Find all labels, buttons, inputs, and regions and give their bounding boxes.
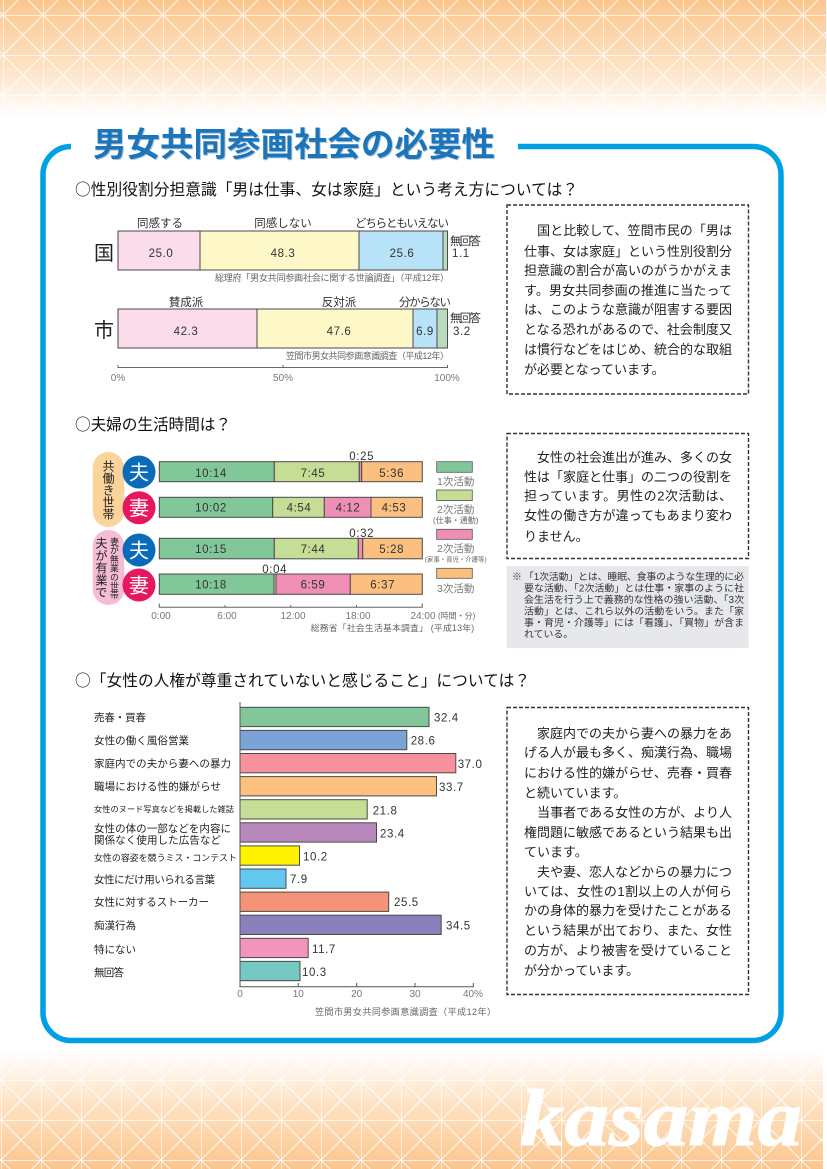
category labels: 痴漢行為 xyxy=(94,919,136,932)
icon: wife xyxy=(122,491,156,524)
value axis xyxy=(237,702,483,1000)
bar: dual-income husband: 0:25 xyxy=(349,451,374,463)
note box: れている。 xyxy=(524,628,573,640)
bar: dual-income wife: 10:02 xyxy=(195,502,227,514)
time axis: 総務省「社会生活基本調査」 (平成13年) xyxy=(311,622,474,633)
percent axis: 50% xyxy=(273,373,293,384)
heading: section 1: ○性別役割分担意識「男は仕事、女は家庭」という考え方については？ xyxy=(75,177,578,200)
legend: (家事・育児・介護等) xyxy=(425,554,487,564)
text box 3: 当事者である女性の方が、より人 xyxy=(524,805,732,820)
chart: gender role stacked bars xyxy=(94,216,482,384)
bar: single-income wife: 6:59 xyxy=(301,580,325,592)
value labels: 33.7 xyxy=(439,782,464,794)
value labels: 7.9 xyxy=(290,874,308,886)
category labels: 家庭内での夫から妻への暴力 xyxy=(94,757,231,770)
heading: section 3: ○「女性の人権が尊重されていないと感じること」については？ xyxy=(75,668,530,691)
bar: single-income husband: 5:28 xyxy=(379,544,404,556)
legend: 2次活動 xyxy=(437,503,474,516)
text box 3: という結果が出ており、また、女性 xyxy=(524,923,732,938)
value axis: 20 xyxy=(351,989,363,1000)
note box: 活動」とは、これら以外の活動をいう。また「家 xyxy=(524,604,744,618)
icon: wife xyxy=(122,568,156,602)
icon: wife: 妻 xyxy=(129,574,149,598)
category labels: 職場における性的嫌がらせ xyxy=(94,780,221,793)
bar row: national: 1.1 xyxy=(452,248,470,260)
bar: dual-income husband: 5:36 xyxy=(379,468,404,480)
note box xyxy=(507,566,749,648)
text box 2: 性は「家庭と仕事」の二つの役割を xyxy=(524,470,732,484)
bar row: national xyxy=(94,216,482,283)
category labels: 女性にだけ用いられる言葉 xyxy=(94,873,216,886)
icon: husband xyxy=(122,456,156,488)
text box 2 xyxy=(507,434,748,558)
category labels: 女性の体の一部などを内容に xyxy=(94,822,231,835)
category labels xyxy=(94,711,237,979)
text box 1: は慣行などをはじめ、統合的な取組 xyxy=(524,342,732,357)
percent axis: 100% xyxy=(434,373,460,384)
pill: husband employed, wife not employed: 妻が無業の世帯 xyxy=(109,536,119,600)
pill: husband employed, wife not employed xyxy=(93,530,124,605)
bar row: city: 無回答 xyxy=(450,311,482,325)
bar: dual-income wife: 4:53 xyxy=(382,502,406,514)
bar row: national: どちらともいえない xyxy=(355,217,449,230)
bar row: city: 分からない xyxy=(399,296,451,309)
bar: dual-income wife: 4:12 xyxy=(336,502,360,514)
category labels: 女性の容姿を競うミス・コンテスト xyxy=(94,852,237,863)
bar: dual-income wife: 4:54 xyxy=(287,502,311,514)
text box 1: 仕事、女は家庭」という性別役割分 xyxy=(524,244,732,259)
text box 3: 権問題に敏感であるという結果も出 xyxy=(524,825,732,840)
bar row: national: 同感しない xyxy=(254,216,312,230)
text box 3: げる人が最も多く、痴漢行為、職場 xyxy=(524,745,732,760)
note box: 「1次活動」とは、睡眠、食事のような生理的に必 xyxy=(524,570,744,583)
bar: single-income wife: 0:04 xyxy=(262,564,287,576)
text box 3: いては、女性の1割以上の人が何ら xyxy=(524,884,732,899)
icon: husband xyxy=(122,534,156,566)
bar: dual-income wife xyxy=(159,497,422,517)
value labels: 10.3 xyxy=(302,967,327,979)
text box 2: りません。 xyxy=(524,529,589,544)
bar row: national: 無回答 xyxy=(450,234,482,248)
value labels xyxy=(290,712,482,979)
time axis: 0:00 xyxy=(151,611,171,622)
time axis xyxy=(151,604,476,633)
bar row: city: 笠間市男女共同参画意識調査（平成12年） xyxy=(286,350,449,361)
text box 3 xyxy=(507,708,748,994)
percent axis xyxy=(111,365,460,384)
legend: 3次活動 xyxy=(437,582,474,595)
text box 2: 女性の社会進出が進み、多くの女 xyxy=(524,450,732,465)
time axis: (時間・分) xyxy=(438,612,476,620)
chart: couples daily time xyxy=(93,451,487,633)
bar row: city: 反対派 xyxy=(322,296,357,309)
bar row: national: 総理府「男女共同参画社会に関する世論調査」（平成12年） xyxy=(215,272,449,283)
value labels: 37.0 xyxy=(458,759,482,771)
icon: wife: 妻 xyxy=(129,497,149,520)
time axis: 24:00 xyxy=(410,611,436,622)
value labels: 21.8 xyxy=(373,805,397,817)
text box 1: す。男女共同参画の推進に当たって xyxy=(524,283,732,298)
text box 1: が必要となっています。 xyxy=(524,362,665,377)
value labels: 34.5 xyxy=(446,920,471,932)
note box: 事・育児・介護等」には「看護」、「買物」が含ま xyxy=(524,616,744,629)
text box 3: の方が、より被害を受けていること xyxy=(524,943,732,958)
bar row: city: 42.3 xyxy=(174,326,198,338)
logo: kasama: kasama xyxy=(520,1075,802,1163)
value axis: 10 xyxy=(293,989,304,1000)
text box 1 xyxy=(507,205,748,394)
bar row: city: 6.9 xyxy=(416,326,434,338)
bar: single-income husband: 10:15 xyxy=(195,544,227,556)
bar: single-income wife xyxy=(159,564,422,594)
value labels: 10.2 xyxy=(303,852,328,864)
value labels: 11.7 xyxy=(312,944,336,956)
legend: 1次活動 xyxy=(437,475,474,488)
text box 3: ています。 xyxy=(524,844,588,860)
time axis: 18:00 xyxy=(345,611,371,622)
bar row: city: 3.2 xyxy=(453,326,471,338)
bar row: national: 25.0 xyxy=(149,248,173,260)
bar row: city: 賛成派 xyxy=(169,295,204,309)
value labels: 25.5 xyxy=(394,897,419,909)
text box 3: が分かっています。 xyxy=(524,963,639,978)
text box 1: 担意識の割合が高いのがうかがえま xyxy=(524,263,732,278)
bar: single-income wife: 10:18 xyxy=(195,580,227,592)
category labels: 関係なく使用した広告など xyxy=(94,834,222,846)
source: 笠間市男女共同参画意識調査（平成12年） xyxy=(315,1006,496,1017)
note box: 会生活を行う上で義務的な性格の強い活動、「3次 xyxy=(524,593,744,606)
bar: dual-income husband: 7:45 xyxy=(301,468,325,480)
bar: dual-income husband: 10:14 xyxy=(195,468,227,480)
bar: single-income husband: 0:32 xyxy=(349,528,374,540)
panel frame xyxy=(43,146,781,1040)
bar row: national: 同感する xyxy=(137,216,183,230)
text box 3: における性的嫌がらせ、売春・買春 xyxy=(524,766,732,780)
category labels: 女性に対するストーカー xyxy=(94,896,209,908)
title: 男女共同参画社会の必要性 xyxy=(93,127,495,164)
pill: dual-income households xyxy=(93,452,124,527)
bars xyxy=(240,707,456,981)
bar: single-income husband xyxy=(159,528,422,559)
note box: ※ xyxy=(512,572,522,583)
pill: dual-income households: 共働き世帯 xyxy=(101,460,115,520)
bar: single-income husband: 7:44 xyxy=(301,544,325,556)
value labels: 28.6 xyxy=(411,736,435,748)
value axis: 40% xyxy=(463,989,483,1000)
text box 1: となる恐れがあるので、社会制度又 xyxy=(524,322,732,337)
percent axis: 0% xyxy=(111,373,125,384)
bar row: city xyxy=(94,295,482,361)
heading: section 2: ○夫婦の生活時間は？ xyxy=(75,412,231,435)
bar row: national: 48.3 xyxy=(271,248,295,260)
icon: husband: 夫 xyxy=(129,462,149,484)
text box 2: 女性の働き方が違ってもあまり変わ xyxy=(524,508,732,523)
chart: horizontal bar chart xyxy=(94,702,496,1017)
category labels: 特にない xyxy=(94,944,136,956)
bottom band with logo xyxy=(0,1050,823,1169)
legend xyxy=(425,462,487,595)
bar row: national: 25.6 xyxy=(390,248,414,260)
value axis: 0 xyxy=(237,989,243,1000)
bar: single-income wife: 6:37 xyxy=(370,580,395,592)
value labels: 23.4 xyxy=(380,828,405,840)
bar row: city: 47.6 xyxy=(327,326,351,338)
text box 1: 国と比較して、笠間市民の「男は xyxy=(524,223,732,238)
value labels: 32.4 xyxy=(434,712,459,724)
category labels: 売春・買春 xyxy=(94,711,146,724)
category labels: 無回答 xyxy=(94,966,124,979)
text box 3: 家庭内での夫から妻への暴力をあ xyxy=(524,726,732,741)
category labels: 女性の働く風俗営業 xyxy=(94,734,190,747)
value axis: 30 xyxy=(409,989,421,1000)
text box 2: 担っています。男性の2次活動は、 xyxy=(524,488,732,504)
note box: 要な活動、「2次活動」とは仕事・家事のように社 xyxy=(524,582,744,594)
bar row: city: 市 xyxy=(94,319,114,342)
bar: dual-income husband xyxy=(159,451,422,482)
legend: 2次活動 xyxy=(437,542,474,555)
top decorative band xyxy=(0,0,826,118)
text box 3: 夫や妻、恋人などからの暴力につ xyxy=(524,864,732,880)
category labels: 女性のヌード写真などを掲載した雑誌 xyxy=(94,804,234,814)
icon: husband: 夫 xyxy=(129,540,149,562)
legend: (仕事・通勤) xyxy=(433,515,479,525)
text box 3: と続いています。 xyxy=(524,786,626,800)
pill: husband employed, wife not employed: 夫が有業で xyxy=(94,537,108,598)
text box 1: は、このような意識が阻害する要因 xyxy=(524,302,732,317)
time axis: 12:00 xyxy=(280,611,306,622)
text box 3: かの身体的暴力を受けたことがある xyxy=(524,903,732,918)
bar row: national: 国 xyxy=(94,243,114,265)
time axis: 6:00 xyxy=(217,611,237,622)
